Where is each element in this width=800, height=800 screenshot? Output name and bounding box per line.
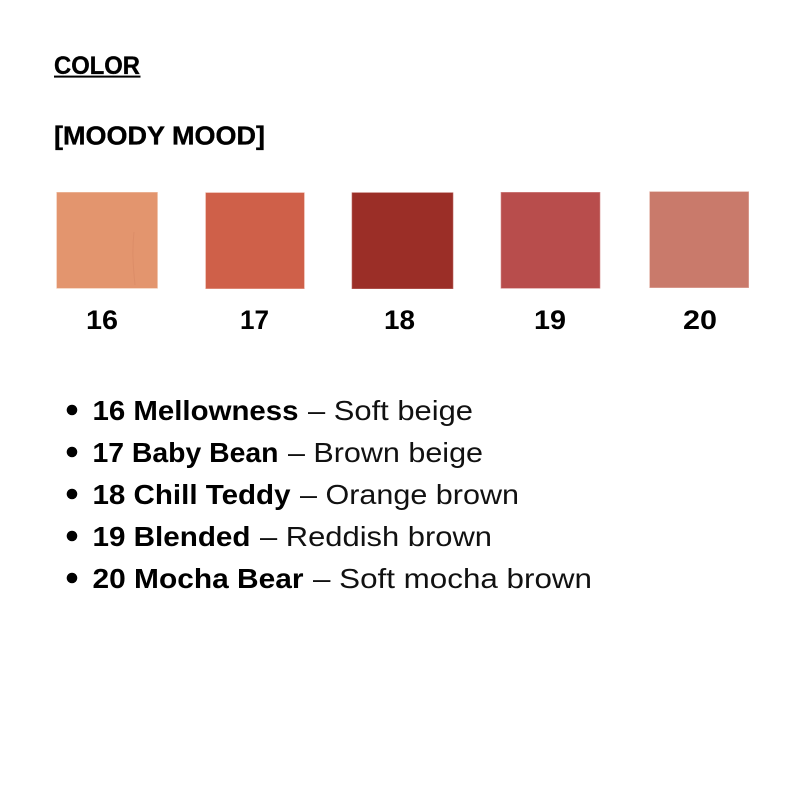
list item 18 Chill Teddy	[67, 479, 519, 510]
shade list	[67, 395, 592, 594]
swatch row	[57, 192, 749, 289]
list item 20 Mocha Bear	[67, 563, 592, 594]
list item 17 Baby Bean: 17 Baby Bean	[92, 437, 278, 468]
list item 17 Baby Bean	[67, 437, 483, 468]
list item 16 Mellowness: – Soft beige	[308, 395, 473, 426]
swatch 20	[650, 192, 749, 288]
swatch 19	[501, 192, 600, 288]
label 19: 19	[534, 305, 566, 335]
list item 20 Mocha Bear: – Soft mocha brown	[313, 563, 592, 594]
list item 19 Blended: 19 Blended	[92, 521, 250, 552]
list item 18 Chill Teddy: – Orange brown	[300, 479, 519, 510]
list item 17 Baby Bean: – Brown beige	[288, 437, 483, 468]
subheading: MOODY MOOD: [MOODY MOOD]	[54, 120, 265, 150]
label 20: 20	[683, 305, 717, 335]
list item 16 Mellowness: 16 Mellowness	[92, 395, 298, 426]
swatch 18	[352, 193, 453, 289]
label 16: 16	[86, 305, 118, 335]
list item 19 Blended: – Reddish brown	[260, 521, 492, 552]
swatch 17	[206, 193, 304, 289]
list item 18 Chill Teddy: 18 Chill Teddy	[92, 479, 291, 510]
label 17: 17	[240, 305, 269, 335]
list item 19 Blended	[67, 521, 492, 552]
list item 20 Mocha Bear: 20 Mocha Bear	[92, 563, 304, 594]
swatch 16	[57, 192, 158, 288]
list item 16 Mellowness	[67, 395, 473, 426]
label 18: 18	[384, 305, 415, 335]
heading: COLOR: COLOR	[54, 52, 140, 80]
swatch number labels	[86, 305, 717, 335]
